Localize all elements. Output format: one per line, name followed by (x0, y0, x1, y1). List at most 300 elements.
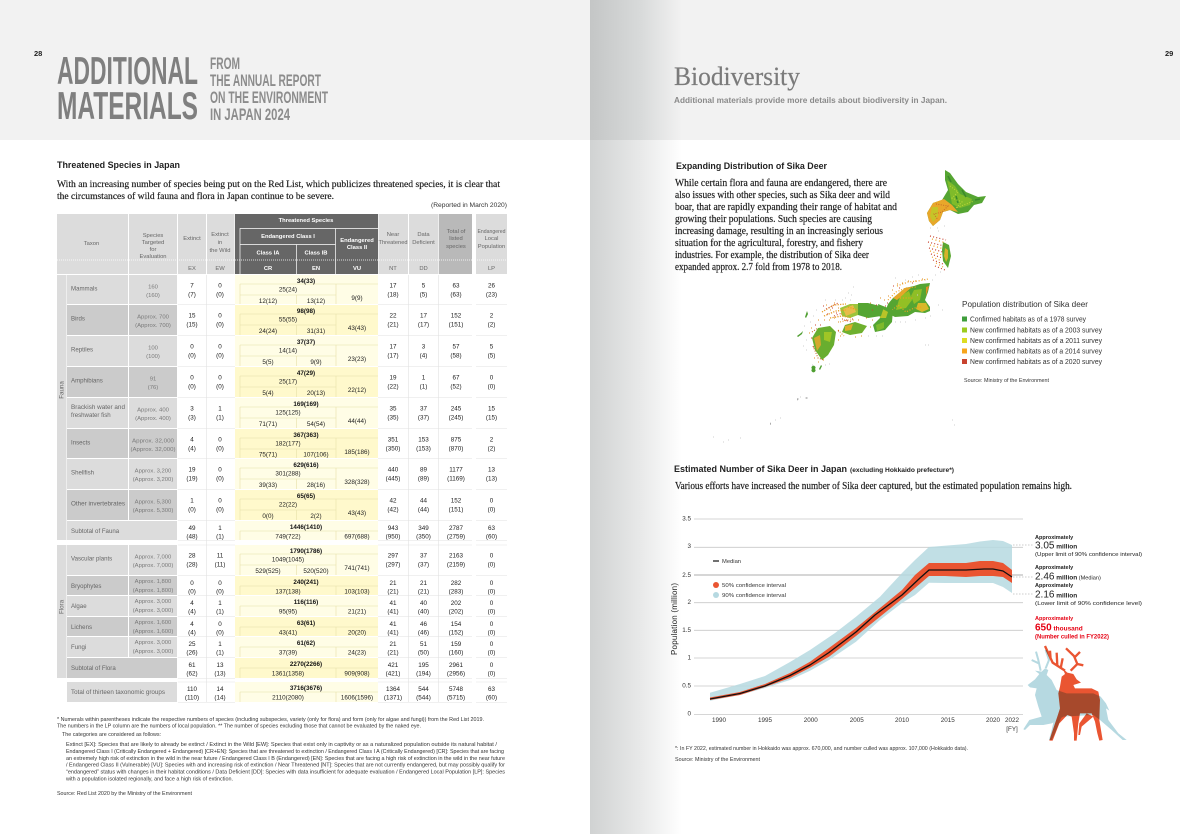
row: Insects: 367(363) (293, 432, 319, 439)
row: Insects: (350) (386, 446, 400, 452)
small islands (797, 311, 822, 372)
table header: VU (353, 266, 361, 272)
row: Total of thirteen taxonomic groups: 63 (488, 686, 495, 693)
row: Algae: 21(21) (348, 608, 366, 616)
row: Brackish water and freshwater fish: (245) (449, 414, 463, 422)
row: Total of thirteen taxonomic groups: 2110(2080) (272, 694, 304, 702)
callout: number culled (1035, 616, 1109, 640)
row: Algae: (202) (449, 608, 463, 616)
row: Birds: 43(43) (348, 325, 366, 332)
row: Brackish water and freshwater fish: Approx. 400 (137, 408, 170, 414)
fauna band (57, 275, 66, 540)
90% confidence band (710, 540, 1012, 701)
row: Total of thirteen taxonomic groups: (544) (416, 694, 431, 702)
row: Bryophytes: (0) (488, 588, 495, 596)
row: Birds: 24(24) (259, 328, 277, 335)
row: Birds: 98(98) (297, 308, 315, 315)
row: Bryophytes: 21 (420, 580, 427, 587)
row: Vascular plants: (0) (488, 562, 495, 568)
table header: Deficient (412, 240, 435, 246)
row: Birds: Birds (71, 316, 85, 322)
row: Insects: (0) (216, 446, 224, 452)
row: Vascular plants: (297) (386, 562, 400, 568)
row: Algae: (0) (488, 608, 495, 616)
row: Subtotal of Fauna: (2759) (447, 534, 465, 540)
row: Birds: (0) (216, 322, 224, 328)
table header: Class IA (257, 250, 280, 256)
x axis labels: 2000 (804, 717, 818, 724)
callout: number culled: Approximately (1035, 616, 1074, 622)
row: Bryophytes: (0) (216, 588, 224, 596)
row: Bryophytes (67, 576, 495, 596)
row: Bryophytes: (21) (387, 588, 399, 596)
row: Subtotal of Fauna: 1446(1410) (290, 524, 322, 531)
table footnotes: an extremely high risk of extinction in the wild in the near future / Endangered Class I B (Endangered) [EN]: Species that are facing a high risk of extinction in the wild in the near future (66, 756, 505, 762)
row: Algae: 1 (218, 600, 222, 607)
row: Shellfish: (Approx. 3,200) (133, 477, 173, 483)
row: Algae: (4) (188, 608, 196, 616)
y axis labels: 3.5 (682, 516, 691, 522)
row: Algae: 202 (451, 600, 462, 607)
row: Birds: (151) (449, 322, 463, 328)
row: Subtotal of Fauna: Subtotal of Fauna (71, 528, 120, 535)
row: Subtotal of Fauna: 349 (418, 525, 429, 532)
chart intro text: Various efforts have increased the number of Sika deer captured, but the estimated population remains high. (675, 481, 1072, 492)
row: Insects: 875 (451, 436, 462, 444)
row: Mammals: 17 (389, 282, 397, 290)
row: Vascular plants: (2159) (447, 562, 465, 568)
table footnotes: The numbers in the LP column are the numbers of local population. ** The number of species excluding those that cannot be evaluated by the naked eye. (57, 724, 421, 730)
subtitle: from the annual report: THE ANNUAL REPORT (210, 72, 321, 90)
row: Shellfish: 301(288) (275, 470, 301, 478)
page number 28: 28 (34, 49, 42, 58)
row: Subtotal of Flora: (2956) (447, 670, 465, 678)
intro paragraph: the circumstances of wild fauna and flora in Japan continue to be severe. (57, 191, 334, 202)
row: Fungi: 1 (218, 641, 222, 648)
callout: number culled: 650 thousand (1035, 622, 1083, 634)
row: Mammals: Mammals (71, 286, 97, 292)
table header: Evaluation (139, 254, 167, 260)
row: Brackish water and freshwater fish: 169(169) (293, 401, 319, 408)
row: Algae: 40 (420, 600, 427, 607)
heading: biodiversity: Biodiversity (674, 62, 800, 91)
row: Lichens: (41) (387, 630, 399, 636)
row: Amphibians: 0 (218, 374, 222, 382)
row: Amphibians: (0) (216, 384, 224, 390)
row: Bryophytes: 0 (190, 580, 194, 587)
row: Subtotal of Flora: 0 (490, 662, 494, 669)
row: Lichens: Approx. 1,600 (135, 620, 172, 626)
y axis labels: 0.5 (682, 682, 691, 690)
table header: Endangered Class I (261, 234, 315, 240)
row: Subtotal of Flora: (62) (186, 670, 198, 678)
table header: Targeted (142, 240, 164, 246)
row: Reptiles: 23(23) (348, 356, 366, 363)
row: Fungi: 61(62) (297, 640, 315, 647)
row: Vascular plants: 2163 (449, 552, 463, 560)
row: Subtotal of Fauna: 2787 (449, 525, 463, 532)
row: Amphibians: (0) (188, 384, 196, 390)
row: Other invertebrates: 43(43) (348, 510, 366, 517)
table header: Class II (347, 245, 368, 251)
row: Fungi: (Approx. 3,000) (133, 649, 173, 655)
table header: Data (417, 232, 430, 238)
row: Amphibians: (22) (387, 384, 399, 390)
table header: Extinct (183, 236, 201, 242)
row: Brackish water and freshwater fish: 3 (190, 406, 194, 412)
row: Mammals: 9(9) (351, 295, 363, 302)
Chubu and Kanto (885, 279, 930, 317)
row: Shellfish: 13 (488, 466, 495, 474)
row: Lichens: (4) (188, 630, 196, 636)
table header: the Wild (210, 248, 230, 254)
row: Birds: 2 (490, 312, 494, 320)
row: Bryophytes: 240(241) (293, 579, 319, 586)
row: Subtotal of Flora: Subtotal of Flora (71, 665, 116, 672)
Chugoku (822, 303, 884, 322)
row: Fungi: (1) (216, 650, 224, 656)
row: Reptiles: (0) (188, 352, 196, 360)
x axis labels: 2005 (850, 717, 864, 724)
row: Other invertebrates: (0) (188, 506, 196, 514)
paragraph: sika deer: increasing damage, resulting in an increasingly serious (675, 226, 883, 237)
row: Birds (67, 305, 495, 335)
row: Subtotal of Flora (67, 658, 495, 678)
row: Reptiles: (17) (387, 352, 399, 360)
row: Shellfish: 89 (420, 466, 427, 474)
row: Subtotal of Flora: 61 (188, 662, 196, 669)
row: Total of thirteen taxonomic groups: (60) (486, 694, 497, 702)
row: Total of thirteen taxonomic groups: 14 (216, 686, 224, 693)
Kansai (873, 304, 893, 332)
table rules (178, 275, 507, 702)
row: Brackish water and freshwater fish: 37 (420, 406, 427, 412)
chart footnote (675, 746, 968, 763)
table header: DD (419, 266, 428, 272)
row: Brackish water and freshwater fish: freshwater fish (71, 412, 111, 419)
row: Reptiles: 100 (148, 346, 159, 352)
row: Algae: (1) (216, 608, 224, 616)
row: Other invertebrates: 0(0) (262, 513, 274, 520)
row: Fungi: (160) (449, 650, 463, 656)
row: Mammals: 34(33) (297, 278, 315, 285)
row: Fungi: Approx. 3,000 (135, 640, 172, 646)
row: Lichens: (Approx. 1,600) (133, 629, 173, 635)
scattered habitat dots (809, 279, 923, 362)
row: Amphibians: (52) (450, 384, 462, 390)
row: Brackish water and freshwater fish: 245 (451, 406, 462, 412)
y axis labels: 3 (687, 543, 691, 550)
row: Brackish water and freshwater fish: 125(125) (275, 410, 301, 416)
row: Birds: (17) (418, 322, 429, 328)
callout: median (1035, 565, 1101, 582)
callout: lower limit: (Lower limit of 90% confidence level) (1035, 601, 1142, 607)
row: Birds: 17 (420, 312, 427, 320)
row: Vascular plants: 741(741) (344, 565, 370, 572)
row: Brackish water and freshwater fish: 44(44) (348, 418, 366, 425)
subtitle: from the annual report (210, 55, 328, 124)
chart legend (713, 559, 786, 599)
row: Mammals: (63) (450, 292, 462, 298)
row: Shellfish: Shellfish (71, 470, 94, 476)
row: Mammals: 12(12) (259, 298, 277, 305)
row: Other invertebrates: 65(65) (297, 493, 315, 500)
row: Birds: (2) (488, 322, 495, 328)
row: Reptiles: 57 (452, 344, 460, 350)
row: Shellfish: 440 (388, 466, 399, 474)
table header: Local (485, 236, 498, 242)
threatened species table (57, 214, 507, 702)
callout: lower limit (1035, 583, 1142, 607)
row: Amphibians: (0) (488, 384, 495, 390)
chart legend: 90% confidence interval (722, 593, 786, 599)
row: Birds: (Approx. 700) (135, 323, 171, 329)
row: Insects: 351 (388, 436, 399, 444)
row: Total of thirteen taxonomic groups: (14) (214, 694, 226, 702)
row: Mammals: 26 (488, 282, 495, 290)
Hokkaido (927, 170, 986, 226)
row: Bryophytes: 282 (451, 580, 462, 587)
row: Subtotal of Fauna (67, 521, 497, 540)
callout: number culled: (Number culled in FY2022) (1035, 634, 1109, 640)
row: Shellfish (67, 459, 497, 489)
row: Subtotal of Flora: (421) (386, 670, 400, 678)
row: Lichens: 0 (218, 621, 222, 628)
row: Bryophytes: 0 (218, 580, 222, 587)
row: Lichens: 4 (190, 621, 194, 628)
row: Insects: 2 (490, 436, 494, 444)
row: Brackish water and freshwater fish: (15) (486, 414, 497, 422)
legend item 1978: Confirmed habitats as of a 1978 survey (970, 316, 1086, 324)
Shikoku (838, 320, 867, 336)
heading: estimated number of sika deer: (excluding Hokkaido prefecture*) (850, 467, 954, 474)
x axis labels (712, 717, 1019, 733)
row: Other invertebrates: 0 (218, 498, 222, 504)
row: Vascular plants: 0 (490, 552, 494, 560)
row: Brackish water and freshwater fish: 71(71) (259, 421, 277, 428)
row: Other invertebrates: 22(22) (279, 502, 297, 508)
row: Lichens: 41 (389, 621, 397, 628)
row: Insects: 107(106) (303, 452, 329, 458)
row: Insects: 185(186) (344, 449, 370, 456)
row: Total of thirteen taxonomic groups: (1371) (384, 694, 402, 702)
row: Bryophytes: (0) (188, 588, 196, 596)
row: Fungi: (26) (186, 650, 198, 656)
row: Other invertebrates: 1 (190, 498, 194, 504)
row: Other invertebrates: (42) (387, 506, 399, 514)
row: Lichens: 154 (451, 621, 462, 628)
row: Other invertebrates: (44) (418, 506, 429, 514)
row: Other invertebrates: 152 (451, 498, 462, 504)
row: Reptiles: (0) (216, 352, 224, 360)
row: Algae: 4 (190, 600, 194, 607)
row: Brackish water and freshwater fish: 54(54) (307, 421, 325, 428)
map: sika deer distribution in Japan (713, 170, 986, 442)
map source: Source: Ministry of the Environment (964, 378, 1049, 384)
table header (57, 214, 507, 274)
row: Insects: 75(71) (259, 452, 277, 458)
row: Insects: (2) (488, 446, 495, 452)
table footnotes (57, 717, 505, 797)
page number 29: 29 (1165, 49, 1173, 58)
row: Total of thirteen taxonomic groups: 1606(1596) (341, 694, 373, 702)
row: Amphibians: 0 (190, 374, 194, 382)
row: Birds: 31(31) (307, 328, 325, 335)
table footnotes: Source: Red List 2020 by the Ministry of the Environment (57, 791, 192, 797)
y axis labels: 0 (687, 710, 691, 718)
row: Birds: 0 (218, 312, 222, 320)
chart legend: 50% confidence interval (722, 583, 786, 589)
row: Fungi: 0 (490, 641, 494, 648)
row: Subtotal of Fauna: 749(722) (275, 534, 301, 540)
callout: lower limit: 2.16 million (1035, 590, 1077, 600)
table header: NT (389, 266, 397, 272)
row: Total of thirteen taxonomic groups: 110 (187, 686, 198, 693)
row: Amphibians: (1) (420, 384, 427, 390)
row: Other invertebrates: (151) (449, 506, 463, 514)
row: Mammals: (7) (188, 292, 196, 298)
row: Insects: (Approx. 32,000) (130, 447, 176, 453)
Kyushu (812, 326, 836, 360)
row: Reptiles: 3 (422, 344, 426, 350)
x axis labels: 1990 (712, 717, 726, 724)
row: Bryophytes: 21 (389, 580, 397, 587)
row: Reptiles: (5) (488, 352, 495, 360)
row: Other invertebrates: 2(2) (310, 513, 322, 520)
row: Shellfish: 39(33) (259, 482, 277, 489)
table footnotes: “endangered” status with changes in their habitat conditions / Data Deficient [DD]: Species with data insufficient for adequate evaluation / Endangered Local Population [LP]: Species (66, 770, 505, 776)
row: Birds: 152 (451, 312, 462, 320)
row: Other invertebrates: Other invertebrates (71, 500, 125, 508)
table header: EW (215, 266, 225, 272)
row: Subtotal of Fauna: (350) (416, 534, 431, 540)
row: Subtotal of Flora: 2961 (449, 662, 463, 669)
row: Mammals (67, 275, 497, 305)
row: Total of thirteen taxonomic groups: 1364 (386, 686, 400, 693)
row: Mammals: 160 (148, 284, 159, 290)
row: Other invertebrates: (0) (216, 506, 224, 514)
table header: Species (143, 233, 163, 239)
row: Amphibians: 5(4) (262, 390, 274, 397)
row: Fungi: 159 (451, 641, 462, 648)
row: Reptiles: (58) (450, 352, 462, 360)
row: Other invertebrates: Approx. 5,300 (135, 500, 172, 506)
row: Subtotal of Flora: 195 (418, 662, 429, 669)
row: Subtotal of Flora: (194) (416, 670, 431, 678)
table header: Near (387, 232, 399, 238)
row: Mammals: 7 (190, 282, 194, 290)
table header: species (446, 244, 466, 250)
subtitle: from the annual report: ON THE ENVIRONMENT (210, 89, 328, 107)
y axis labels: 2 (687, 599, 691, 606)
row: Subtotal of Flora: 2270(2266) (290, 661, 322, 668)
y axis labels: 1 (687, 654, 691, 662)
row: Reptiles: 5(5) (262, 359, 274, 366)
row: Insects: Approx. 32,000 (132, 438, 175, 444)
row: Mammals: 5 (422, 282, 426, 290)
row: Total of thirteen taxonomic groups: Total of thirteen taxonomic groups (71, 689, 165, 696)
row: Vascular plants: (Approx. 7,000) (133, 563, 173, 569)
map legend (962, 300, 1102, 384)
row: Brackish water and freshwater fish: Brackish water and (71, 404, 125, 411)
row: Fungi: (0) (488, 650, 495, 656)
line chart: estimated population (670, 516, 1033, 733)
row: Mammals: (5) (420, 292, 427, 298)
row: Brackish water and freshwater fish: (Approx. 400) (135, 416, 171, 422)
legend item 2011: New confirmed habitats as of a 2011 survey (970, 338, 1102, 345)
heading: expanding distribution: Expanding Distribution of Sika Deer (676, 161, 827, 171)
table footnotes: Extinct [EX]: Species that are likely to already be extinct / Extinct in the Wild [EW]: Species that exist only in captivity or as a naturalized population outside its natural habitat / (66, 742, 497, 748)
row: Lichens: (152) (449, 630, 463, 636)
x axis labels: 2010 (895, 717, 909, 724)
row: Fungi: (50) (418, 650, 429, 656)
x axis labels: [FY] (1006, 726, 1018, 733)
fauna band: Fauna (58, 381, 66, 399)
x axis labels: 2015 (941, 717, 955, 724)
paragraph: sika deer: also issues with other species, such as Sika deer and wild (675, 190, 891, 201)
row: Brackish water and freshwater fish (67, 398, 497, 428)
row: Reptiles: 9(9) (310, 359, 322, 366)
row: Bryophytes: 0 (490, 580, 494, 587)
row: Shellfish: 629(616) (293, 462, 319, 469)
row: Fungi: 37(39) (279, 650, 297, 656)
table footnotes: Endangered Class I (Critically Endangered + Endangered) [CR+EN]: Species that are threatened to extinction / Endangered Class I A (Critically Endangered) [CR]: Species that are facing (66, 749, 504, 755)
row: Subtotal of Flora: (13) (214, 670, 226, 678)
row: Bryophytes: Approx. 1,800 (135, 579, 172, 585)
row: Shellfish: (445) (386, 476, 400, 482)
row: Other invertebrates: 44 (420, 498, 427, 504)
row: Insects: 0 (218, 436, 222, 444)
row: Mammals: 25(24) (279, 286, 297, 294)
row: Amphibians: 91 (150, 376, 156, 382)
row: Brackish water and freshwater fish: (37) (418, 414, 429, 422)
row: Fungi: (21) (387, 650, 399, 656)
paragraph: sika deer: boar, that are rapidly expanding their range of habitat and (675, 202, 898, 213)
row: Lichens: 63(61) (297, 620, 315, 627)
flora band (57, 545, 66, 678)
row: Algae: Approx. 3,000 (135, 599, 172, 605)
row: Reptiles: 37(37) (297, 339, 315, 346)
chart legend: Median (722, 559, 741, 565)
y axis labels (682, 516, 691, 718)
row: Algae: 116(116) (294, 599, 318, 606)
row: Subtotal of Flora: 909(908) (344, 670, 370, 678)
row: Algae: Algae (71, 603, 87, 610)
icon: blue deer (1023, 650, 1127, 740)
leader lines (1013, 545, 1033, 594)
callout: upper limit (1035, 535, 1142, 558)
row: Other invertebrates: (0) (488, 506, 495, 514)
row: Vascular plants: 297 (388, 552, 399, 560)
row: Other invertebrates: (Approx. 5,300) (133, 508, 173, 514)
row: Total of thirteen taxonomic groups: 3716(3676) (290, 685, 322, 692)
icon: orange deer (1045, 646, 1103, 741)
row: Shellfish: 1177 (449, 466, 463, 474)
legend item 2003: New confirmed habitats as of a 2003 survey (970, 328, 1102, 334)
row: Birds: (15) (186, 322, 198, 328)
row: Lichens: (0) (488, 630, 495, 636)
title: additional materials (57, 50, 198, 128)
row: Amphibians: (76) (148, 385, 158, 391)
table footnotes: with a population isolated regionally, and face a high risk of extinction. (65, 776, 233, 782)
row: Fungi: 21 (389, 641, 397, 648)
row: Brackish water and freshwater fish: 35 (389, 406, 397, 412)
row: Bryophytes: (21) (418, 588, 429, 596)
row: Brackish water and freshwater fish: 15 (488, 406, 495, 412)
row: Subtotal of Fauna: (950) (386, 534, 400, 540)
row: Shellfish: 28(16) (307, 482, 325, 489)
row: Subtotal of Fauna: 1 (218, 525, 222, 532)
